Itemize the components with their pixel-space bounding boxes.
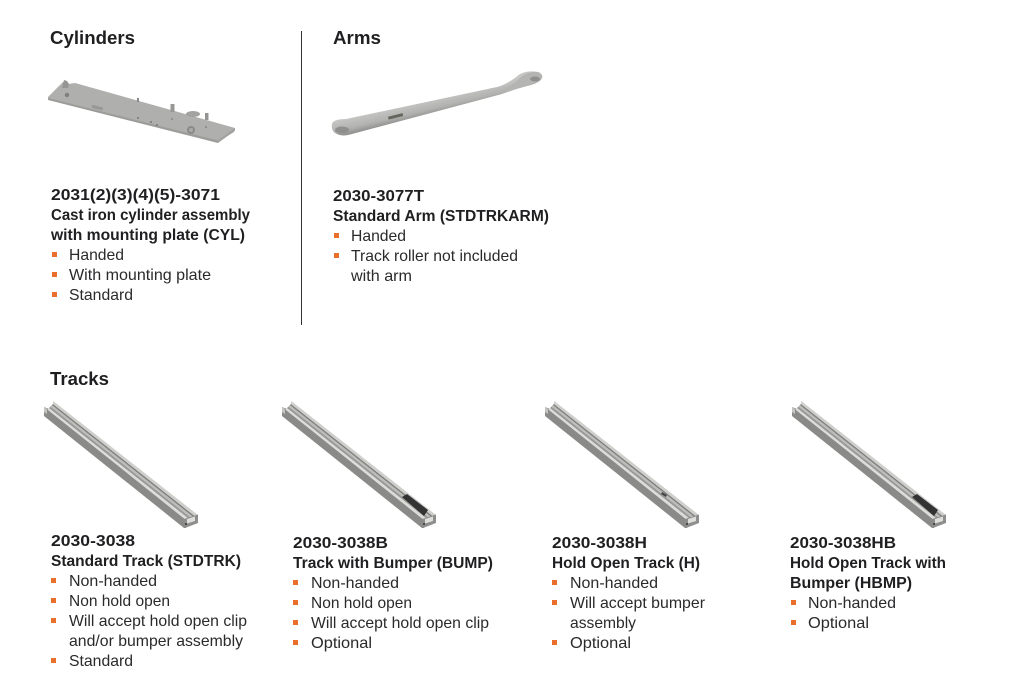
standard track text block: Standard Track (STDTRK) bbox=[51, 553, 241, 570]
cylinder text block: 2031(2)(3)(4)(5)-3071 bbox=[51, 187, 220, 204]
image: hold open track with bumper bbox=[792, 401, 946, 528]
standard track text block: Non hold open bbox=[69, 593, 170, 610]
hold open track text block bbox=[552, 535, 706, 652]
arm text block: Track roller not included bbox=[351, 248, 518, 265]
hold open track with bumper text block: Hold Open Track with bbox=[790, 555, 946, 572]
cylinder text block: With mounting plate bbox=[69, 267, 211, 284]
image: cylinder assembly bbox=[48, 80, 235, 143]
image: standard arm bbox=[332, 71, 542, 135]
hold open track text block: 2030-3038H bbox=[552, 535, 647, 552]
arm text block bbox=[333, 188, 549, 285]
hold open track text block: Non-handed bbox=[570, 575, 658, 592]
hold open track with bumper text block: Bumper (HBMP) bbox=[790, 575, 912, 592]
hold open track text block: assembly bbox=[570, 615, 636, 632]
standard track text block: Standard bbox=[69, 653, 133, 670]
standard track text block: and/or bumper assembly bbox=[69, 633, 243, 650]
hold open track with bumper text block: Optional bbox=[808, 615, 869, 632]
cylinder text block: Cast iron cylinder assembly bbox=[51, 207, 250, 224]
hold open track with bumper text block bbox=[790, 535, 946, 632]
arm text block: 2030-3077T bbox=[333, 188, 425, 205]
standard track text block: Non-handed bbox=[69, 573, 157, 590]
arm text block: with arm bbox=[350, 268, 412, 285]
cylinder text block bbox=[50, 187, 250, 304]
cylinder text block: with mounting plate (CYL) bbox=[50, 227, 245, 244]
standard track text block: 2030-3038 bbox=[51, 533, 135, 550]
hold open track text block: Optional bbox=[570, 635, 631, 652]
hold open track with bumper text block: 2030-3038HB bbox=[790, 535, 896, 552]
cylinder text block: Handed bbox=[69, 247, 124, 264]
bumper track text block: Non hold open bbox=[311, 595, 412, 612]
heading: Tracks: Tracks bbox=[50, 368, 109, 389]
cylinder text block: Standard bbox=[69, 287, 133, 304]
bumper track text block: Will accept hold open clip bbox=[311, 615, 489, 632]
hold open track text block: Will accept bumper bbox=[570, 595, 706, 612]
bumper track text block bbox=[293, 535, 493, 652]
heading: Arms: Arms bbox=[333, 27, 381, 48]
image: hold open track bbox=[545, 401, 699, 528]
arm text block: Handed bbox=[351, 228, 406, 245]
bumper track text block: 2030-3038B bbox=[293, 535, 388, 552]
arm text block: Standard Arm (STDTRKARM) bbox=[333, 208, 549, 225]
bumper track text block: Track with Bumper (BUMP) bbox=[293, 555, 493, 572]
standard track text block bbox=[51, 533, 247, 670]
standard track text block: Will accept hold open clip bbox=[69, 613, 247, 630]
heading: Cylinders: Cylinders bbox=[50, 27, 135, 48]
hold open track with bumper text block: Non-handed bbox=[808, 595, 896, 612]
bumper track text block: Optional bbox=[311, 635, 372, 652]
image: track with bumper bbox=[282, 401, 436, 528]
bumper track text block: Non-handed bbox=[311, 575, 399, 592]
hold open track text block: Hold Open Track (H) bbox=[552, 555, 700, 572]
image: standard track bbox=[44, 401, 198, 528]
